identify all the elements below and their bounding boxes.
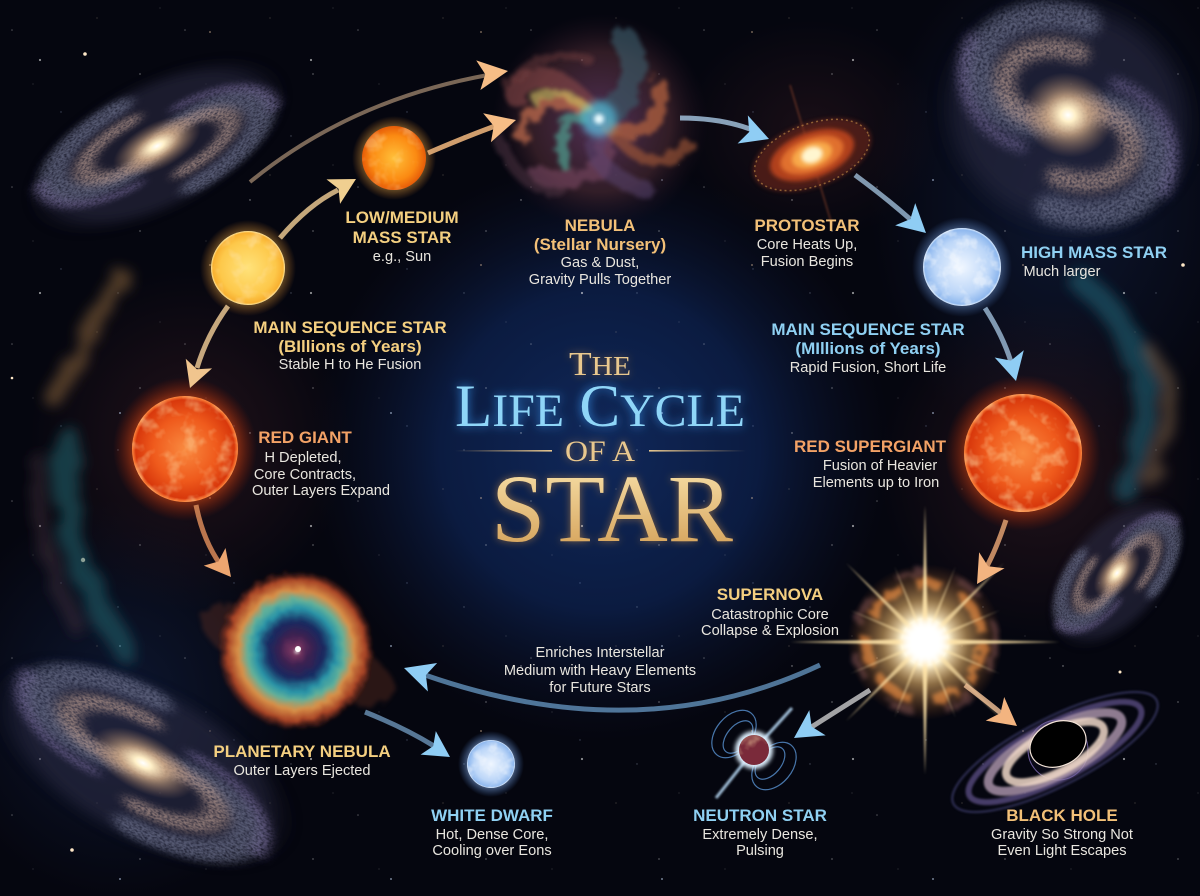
label: red supergiant: Elements up to Iron — [813, 475, 939, 491]
supernova — [790, 505, 1060, 775]
right nebula wisps — [1085, 285, 1169, 490]
red supergiant — [945, 375, 1101, 531]
label: red giant: H Depleted, — [264, 450, 342, 466]
label: protostar: Core Heats Up, — [757, 237, 857, 253]
red giant — [113, 377, 257, 521]
label: low/medium mass star: MASS STAR — [353, 228, 451, 247]
main sequence star, low mass — [200, 220, 296, 316]
nebula — [492, 14, 708, 230]
planetary nebula — [188, 570, 408, 730]
title — [455, 346, 746, 562]
label: white dwarf: WHITE DWARF — [431, 806, 553, 825]
galaxy: top left — [19, 35, 295, 257]
label: red giant: Outer Layers Expand — [252, 483, 390, 499]
label: main sequence star, millions of years — [771, 320, 965, 376]
label: white dwarf: Cooling over Eons — [432, 843, 552, 859]
label: main sequence star, millions of years: Rapid Fusion, Short Life — [790, 360, 946, 376]
left nebula wisps — [38, 275, 125, 650]
label: enriches interstellar medium: for Future Stars — [549, 680, 651, 696]
arrow: red supergiant to supernova — [964, 520, 1006, 592]
arrow: nebula to protostar — [680, 115, 774, 153]
label: enriches interstellar medium — [504, 645, 696, 696]
label: high mass star: HIGH MASS STAR — [1021, 243, 1167, 262]
label: planetary nebula — [213, 742, 391, 779]
label: supernova: Catastrophic Core — [711, 607, 829, 623]
label: main sequence star, millions of years: (MIllions of Years) — [795, 339, 941, 358]
protostar — [743, 85, 881, 225]
label: red supergiant: RED SUPERGIANT — [794, 437, 947, 456]
high mass star — [912, 217, 1012, 317]
label: main sequence star, billions of years: (BIllions of Years) — [278, 337, 422, 356]
white dwarf — [458, 731, 524, 797]
label: red supergiant — [794, 437, 947, 491]
arrow: main sequence to low mass star — [280, 167, 363, 238]
label: supernova: SUPERNOVA — [717, 585, 823, 604]
title rule: right — [649, 450, 746, 452]
label: neutron star — [693, 806, 827, 859]
neutron star — [703, 702, 805, 798]
arrow: main sequence to nebula (long arc) — [250, 56, 510, 182]
title rule: left — [455, 450, 552, 452]
label: nebula — [529, 216, 671, 288]
label: red giant: RED GIANT — [258, 428, 352, 447]
label: nebula: (Stellar Nursery) — [534, 235, 666, 254]
label: planetary nebula: Outer Layers Ejected — [233, 763, 371, 779]
arrow: low mass star to nebula — [428, 106, 520, 153]
label: main sequence star, billions of years: MAIN SEQUENCE STAR — [253, 318, 447, 337]
label: neutron star: Extremely Dense, — [702, 827, 818, 843]
arrow: supernova to planetary nebula (long arc) — [399, 654, 820, 710]
low/medium mass star — [352, 116, 436, 200]
title line: Life Cycle: LIFE CYCLE — [455, 373, 745, 439]
label: planetary nebula: PLANETARY NEBULA — [213, 742, 391, 761]
arrow: red giant to planetary nebula — [196, 505, 242, 586]
arrow: protostar to high mass star — [855, 175, 936, 244]
title line: The: THE — [569, 346, 631, 383]
label: enriches interstellar medium: Enriches Interstellar — [536, 645, 665, 661]
arrow: supernova to black hole — [965, 685, 1026, 738]
arrow: supernova to neutron star — [786, 690, 870, 751]
label: nebula: NEBULA — [565, 216, 635, 235]
label: black hole: Gravity So Strong Not — [991, 827, 1133, 843]
arrow: high mass star to red supergiant — [985, 308, 1031, 385]
title line: Star: STAR — [491, 455, 733, 562]
label: main sequence star, billions of years: Stable H to He Fusion — [279, 357, 421, 373]
galaxy: bottom left — [0, 632, 305, 894]
label: black hole: Even Light Escapes — [998, 843, 1126, 859]
arrow: main sequence to red giant — [177, 306, 228, 393]
label: low/medium mass star: e.g., Sun — [373, 249, 431, 265]
label: low/medium mass star — [345, 208, 459, 265]
label: low/medium mass star: LOW/MEDIUM — [345, 208, 459, 227]
label: red supergiant: Fusion of Heavier — [823, 458, 937, 474]
title line: of a: OF A — [565, 435, 635, 468]
label: protostar: Fusion Begins — [761, 254, 853, 270]
label: nebula: Gas & Dust, — [561, 255, 639, 271]
label: high mass star: Much larger — [1023, 264, 1101, 280]
black hole — [938, 670, 1172, 834]
label: high mass star — [1021, 243, 1167, 280]
arrow: planetary nebula to white dwarf — [365, 712, 458, 769]
label: supernova — [701, 585, 839, 639]
label: supernova: Collapse & Explosion — [701, 623, 839, 639]
label: red giant: Core Contracts, — [254, 467, 356, 483]
label: protostar: PROTOSTAR — [754, 216, 860, 235]
label: white dwarf: Hot, Dense Core, — [436, 827, 548, 843]
label: red giant — [252, 428, 390, 499]
label: neutron star: Pulsing — [736, 843, 784, 859]
label: protostar — [754, 216, 860, 270]
galaxy: right — [1033, 484, 1200, 662]
galaxy: top right — [919, 0, 1200, 257]
label: black hole — [991, 806, 1133, 859]
label: neutron star: NEUTRON STAR — [693, 806, 827, 825]
label: main sequence star, billions of years — [253, 318, 447, 373]
label: main sequence star, millions of years: MAIN SEQUENCE STAR — [771, 320, 965, 339]
label: nebula: Gravity Pulls Together — [529, 272, 671, 288]
label: enriches interstellar medium: Medium with Heavy Elements — [504, 663, 696, 679]
label: black hole: BLACK HOLE — [1006, 806, 1118, 825]
label: white dwarf — [431, 806, 553, 859]
